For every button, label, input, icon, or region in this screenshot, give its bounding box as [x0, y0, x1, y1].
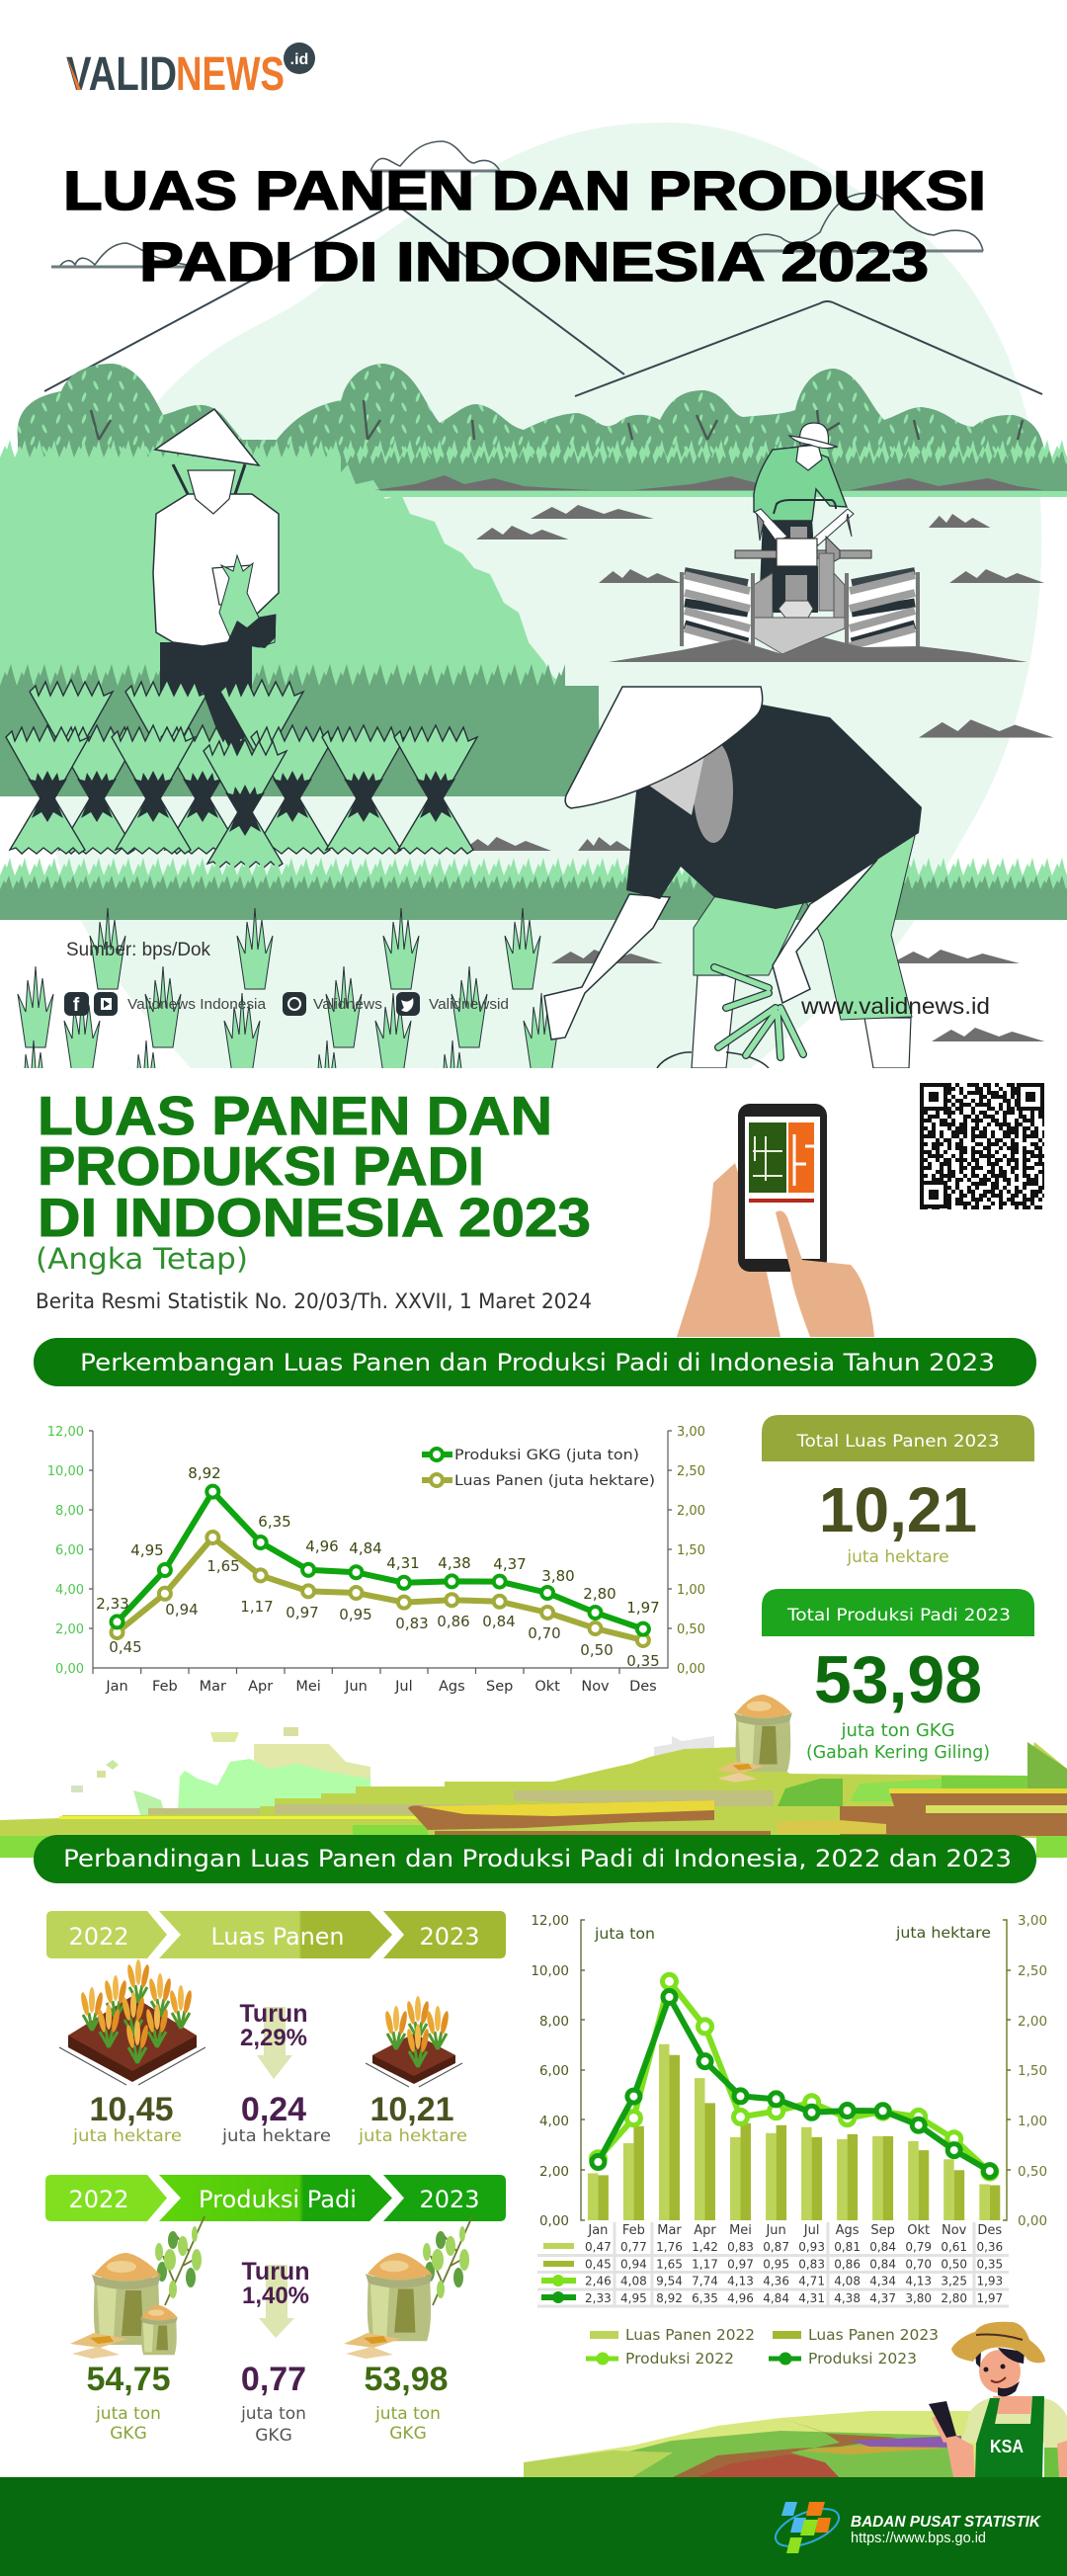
icon: youtube	[94, 992, 118, 1016]
row: luas panen 2022: 0,83	[727, 2240, 754, 2254]
bars: luas panen 2023	[598, 2055, 1000, 2220]
footer bar	[0, 2477, 1067, 2576]
chevron header	[46, 1911, 506, 1958]
value: 2023 production: GKG	[389, 2424, 427, 2444]
title	[63, 159, 986, 292]
chevron header: 2022	[68, 2186, 129, 2213]
right axis labels: 2,50	[1018, 1963, 1047, 1979]
chevron header: 2022	[68, 1923, 129, 1951]
axis units	[594, 1924, 991, 1943]
mint hill background	[47, 123, 1041, 1068]
stat card: total harvested area	[762, 1415, 1034, 1567]
right axis labels: 0,00	[677, 1662, 705, 1677]
rice bundles	[6, 680, 477, 868]
row: luas panen 2022: 0,61	[941, 2240, 967, 2254]
icon: twitter	[396, 992, 420, 1016]
value: change in production: juta ton	[240, 2404, 306, 2424]
production value labels: 4,96	[305, 1537, 339, 1555]
stat card: total harvested area: juta hektare	[846, 1547, 949, 1567]
production series	[117, 1492, 643, 1629]
panel: harvested area comparison	[46, 1911, 506, 2146]
chart legend: Produksi 2023	[808, 2350, 917, 2368]
icon: small rice field plot	[366, 1996, 462, 2087]
row: produksi 2022: 4,71	[798, 2275, 825, 2288]
line chart: monthly production and harvested area 2023	[47, 1425, 705, 1695]
production value labels: 2,33	[96, 1595, 129, 1613]
production value labels: 1,97	[626, 1599, 660, 1617]
combo chart: 2022 vs 2023	[531, 1913, 1047, 2368]
harvested area value labels: 0,94	[165, 1601, 199, 1619]
value: 2022 harvested area: juta hektare	[72, 2126, 182, 2146]
decline label	[242, 2258, 309, 2309]
value: change in harvested area: juta hektare	[221, 2126, 331, 2146]
right axis labels: 1,00	[677, 1583, 705, 1598]
icon: farmer with conical hat	[153, 409, 279, 771]
row: produksi 2022: 4,13	[727, 2275, 754, 2288]
left axis labels: 2,00	[539, 2164, 569, 2180]
left axis labels: 6,00	[55, 1543, 84, 1558]
value: 2023 production: juta ton	[374, 2404, 441, 2424]
title: PADI DI INDONESIA 2023	[139, 230, 929, 292]
harvested area value labels: 0,84	[482, 1613, 516, 1630]
right axis labels: 3,00	[677, 1425, 705, 1440]
BPS name and url: https://www.bps.go.id	[851, 2530, 986, 2546]
decline label: Turun	[240, 2000, 307, 2028]
month labels: Okt	[534, 1679, 560, 1695]
left axis labels: 6,00	[539, 2063, 569, 2079]
row: produksi 2023: 3,80	[905, 2291, 932, 2305]
right axis labels: 1,00	[1018, 2114, 1047, 2129]
table header: Mei	[729, 2223, 752, 2238]
row: produksi 2023: 1,97	[976, 2291, 1003, 2305]
row: produksi 2023: 4,38	[834, 2291, 861, 2305]
table header: Des	[977, 2223, 1002, 2238]
row: luas panen 2022: 0,93	[798, 2240, 825, 2254]
logo: Validnews: VALID	[66, 48, 177, 101]
logo: BPS	[771, 2501, 844, 2554]
value: change in harvested area	[221, 2091, 331, 2146]
chart legend: Produksi GKG (juta ton)	[454, 1448, 639, 1463]
row: luas panen 2023: 0,94	[620, 2257, 647, 2271]
row: produksi 2022: 4,34	[869, 2275, 896, 2288]
logo: Validnews	[66, 42, 315, 101]
row: luas panen 2023: 0,95	[763, 2257, 789, 2271]
month labels: Jul	[394, 1679, 413, 1695]
row: luas panen 2023: 0,70	[905, 2257, 932, 2271]
right axis labels: 0,50	[677, 1622, 705, 1637]
row: produksi 2022: 9,54	[656, 2275, 683, 2288]
value: 2023 production	[364, 2361, 449, 2444]
axes	[581, 1920, 585, 2220]
row: luas panen 2023: 0,83	[798, 2257, 825, 2271]
production value labels: 4,95	[130, 1541, 164, 1559]
table header	[587, 2223, 1002, 2238]
value: 2023 harvested area	[358, 2091, 467, 2146]
table header: Apr	[694, 2223, 716, 2238]
landscape: bottom hill	[524, 2411, 1067, 2477]
month labels: Jun	[344, 1679, 368, 1695]
left axis labels: 12,00	[531, 1913, 569, 1929]
table header: Jan	[587, 2223, 608, 2238]
field shadow band	[0, 664, 599, 796]
row: luas panen 2023: 0,86	[834, 2257, 861, 2271]
harvested area value labels: 0,70	[528, 1624, 561, 1642]
left axis labels: 12,00	[47, 1425, 84, 1440]
value: change in production	[240, 2361, 306, 2446]
icon: facebook	[64, 992, 89, 1016]
right axis labels	[677, 1425, 705, 1677]
logo: Validnews: .id	[290, 51, 308, 68]
row: luas panen 2022: 0,84	[869, 2240, 896, 2254]
decline label	[240, 2000, 307, 2051]
QR code	[920, 1083, 1044, 1208]
stat card: total harvested area: Total Luas Panen 2023	[795, 1432, 1000, 1452]
data table	[537, 2222, 1009, 2306]
production value labels: 4,37	[493, 1555, 527, 1573]
value: change in production: GKG	[255, 2426, 292, 2446]
row: produksi 2023: 6,35	[692, 2291, 718, 2305]
harvested area value labels: 0,35	[626, 1652, 660, 1670]
row: luas panen 2023: 0,97	[727, 2257, 754, 2271]
value: 2022 harvested area: 10,45	[89, 2091, 174, 2128]
tree line	[18, 364, 1045, 464]
right axis labels: 2,50	[677, 1464, 705, 1479]
icon: farmer on tractor	[609, 423, 1027, 662]
row: luas panen 2022: 0,47	[585, 2240, 612, 2254]
row: produksi 2023	[541, 2291, 1003, 2305]
chevron header	[45, 2175, 506, 2221]
row: produksi 2022: 3,25	[941, 2275, 967, 2288]
row: produksi 2022: 4,36	[763, 2275, 789, 2288]
chevron header: Luas Panen	[211, 1923, 344, 1951]
icon: rice sacks 2022	[70, 2216, 205, 2359]
banner: Perbandingan: Perbandingan Luas Panen dan Produksi Padi di Indonesia, 2022 dan 2023	[63, 1845, 1012, 1872]
chart legend: Luas Panen (juta hektare)	[454, 1473, 655, 1489]
harvested area value labels: 0,97	[286, 1604, 319, 1621]
landscape: terraced rice fields	[0, 1695, 1067, 1858]
stat card: total harvested area: 10,21	[819, 1474, 977, 1545]
harvested area value labels: 0,45	[109, 1638, 142, 1656]
left axis labels: 4,00	[539, 2114, 569, 2129]
decline label: Turun	[242, 2258, 309, 2285]
handle: instagram: Validnews	[313, 996, 382, 1013]
harvested area value labels: 0,95	[339, 1606, 372, 1623]
publication reference: Berita Resmi Statistik No. 20/03/Th. XXVII, 1 Maret 2024	[36, 1289, 592, 1313]
row: produksi 2022	[541, 2275, 1003, 2288]
section heading: PRODUKSI PADI	[38, 1135, 484, 1197]
production value labels: 3,80	[541, 1567, 575, 1585]
icon: instagram	[283, 992, 306, 1016]
production value labels: 8,92	[188, 1464, 221, 1482]
left axis labels	[47, 1425, 84, 1677]
stat card: total rice production: Total Produksi Padi 2023	[786, 1606, 1011, 1625]
row: luas panen 2022: 0,36	[976, 2240, 1003, 2254]
value: 2022 production: juta ton	[95, 2404, 161, 2424]
right axis labels: 2,00	[1018, 2014, 1047, 2030]
left axis labels: 4,00	[55, 1583, 84, 1598]
panel: rice production comparison	[45, 2175, 506, 2446]
axis units: juta ton	[594, 1925, 655, 1943]
subtitle: (Angka Tetap)	[36, 1242, 248, 1276]
row: produksi 2023: 4,31	[798, 2291, 825, 2305]
BPS name and url	[851, 2514, 1041, 2546]
stat card: total rice production: juta ton GKG	[840, 1720, 955, 1741]
left axis labels: 8,00	[539, 2014, 569, 2030]
harvested area value labels: 0,83	[395, 1615, 429, 1632]
row: luas panen 2022: 0,77	[620, 2240, 647, 2254]
table header: Ags	[836, 2223, 860, 2238]
BPS name and url: BADAN PUSAT STATISTIK	[851, 2514, 1041, 2531]
value: 2023 harvested area: juta hektare	[358, 2126, 467, 2146]
line: produksi 2022	[598, 1981, 990, 2172]
harvested area value labels	[109, 1557, 660, 1670]
row: produksi 2022: 1,93	[976, 2275, 1003, 2288]
banner: Perkembangan: Perkembangan Luas Panen dan Produksi Padi di Indonesia Tahun 2023	[80, 1349, 995, 1376]
icon: facebook: f	[73, 995, 80, 1016]
harvested area value labels: 1,17	[240, 1598, 274, 1616]
right axis labels: 0,00	[1018, 2213, 1047, 2229]
mountain outlines	[44, 204, 1042, 396]
chart legend	[422, 1448, 655, 1489]
production value labels: 6,35	[258, 1513, 291, 1531]
value: 2023 harvested area: 10,21	[369, 2091, 454, 2128]
decline label: 1,40%	[242, 2283, 309, 2309]
production value labels	[96, 1464, 660, 1617]
left axis labels: 2,00	[55, 1622, 84, 1637]
icon: woman planting rice	[544, 687, 922, 1068]
left axis labels: 10,00	[531, 1963, 569, 1979]
stat card: total rice production: (Gabah Kering Giling)	[806, 1742, 990, 1763]
month labels: Sep	[486, 1679, 513, 1695]
banner: Perkembangan	[34, 1338, 1036, 1386]
icon: large rice field plot	[59, 1959, 205, 2085]
axis units: juta hektare	[895, 1924, 991, 1942]
month labels	[105, 1679, 657, 1695]
section heading: DI INDONESIA 2023	[38, 1187, 591, 1248]
value: 2023 production: 53,98	[364, 2361, 449, 2398]
row: produksi 2023: 4,95	[620, 2291, 647, 2305]
right axis labels: 2,00	[677, 1504, 705, 1519]
month labels: Mei	[295, 1679, 321, 1695]
banner: Perbandingan	[34, 1835, 1036, 1883]
left axis labels: 10,00	[47, 1464, 84, 1479]
table header: Okt	[907, 2223, 930, 2238]
month labels: Nov	[581, 1679, 610, 1695]
row: produksi 2022: 4,13	[905, 2275, 932, 2288]
value: change in harvested area: 0,24	[241, 2091, 306, 2128]
left axis labels: 8,00	[55, 1504, 84, 1519]
harvested area value labels: 0,50	[580, 1641, 614, 1659]
arrow: decline	[259, 2265, 294, 2338]
row: luas panen 2022: 0,79	[905, 2240, 932, 2254]
logo: Validnews: NEWS	[176, 48, 285, 101]
chevron header: 2023	[419, 2186, 480, 2213]
table header: Sep	[870, 2223, 895, 2238]
chart legend: Produksi 2022	[625, 2350, 734, 2368]
row: luas panen 2022	[543, 2240, 1003, 2254]
handle: twitter: Validnewsid	[429, 996, 509, 1013]
icon: KSA farmer mascot	[929, 2322, 1067, 2478]
table header: Jul	[803, 2223, 819, 2238]
icon: phone held in hand	[677, 1104, 874, 1337]
arrow: decline	[257, 2007, 292, 2079]
month labels: Jan	[105, 1679, 128, 1695]
month labels: Ags	[439, 1679, 465, 1695]
row: luas panen 2023	[543, 2257, 1003, 2271]
row: luas panen 2023: 0,84	[869, 2257, 896, 2271]
soil mounds	[374, 475, 1054, 1041]
row: produksi 2023: 4,37	[869, 2291, 896, 2305]
harvested area value labels: 1,65	[206, 1557, 240, 1575]
stat card: total rice production: 53,98	[814, 1642, 982, 1717]
production value labels: 4,31	[386, 1554, 420, 1572]
left axis labels: 0,00	[539, 2213, 569, 2229]
chart legend	[586, 2326, 939, 2368]
right axis labels: 1,50	[1018, 2063, 1047, 2079]
seedlings	[16, 908, 557, 1068]
production value labels: 2,80	[583, 1585, 616, 1603]
section heading: LUAS PANEN DAN	[38, 1085, 552, 1146]
row: produksi 2023: 2,33	[585, 2291, 612, 2305]
month labels: Des	[629, 1679, 657, 1695]
bars: luas panen 2022	[588, 2044, 990, 2220]
light green rice field	[0, 464, 600, 731]
row: luas panen 2022: 1,76	[656, 2240, 683, 2254]
row: luas panen 2023: 0,50	[941, 2257, 967, 2271]
axes	[89, 1431, 672, 1674]
month labels: Feb	[152, 1679, 178, 1695]
harvested area value labels: 0,86	[437, 1613, 470, 1630]
left axis labels: 0,00	[55, 1662, 84, 1677]
clouds	[51, 141, 983, 267]
title: LUAS PANEN DAN PRODUKSI	[63, 159, 986, 221]
grass band lower	[0, 858, 1067, 920]
right axis labels: 3,00	[1018, 1913, 1047, 1929]
row: luas panen 2022: 0,87	[763, 2240, 789, 2254]
handle: facebook and youtube: Validnews Indonesia	[127, 996, 267, 1013]
row: luas panen 2022: 0,81	[834, 2240, 861, 2254]
social media row	[64, 992, 509, 1016]
right axis labels	[1018, 1913, 1047, 2229]
production value labels: 4,38	[438, 1554, 471, 1572]
table header: Nov	[942, 2223, 967, 2238]
row: produksi 2023: 2,80	[941, 2291, 967, 2305]
value: 2022 harvested area	[72, 2091, 182, 2146]
chart legend: Luas Panen 2023	[808, 2326, 939, 2344]
table header: Feb	[622, 2223, 645, 2238]
chevron header: 2023	[419, 1923, 480, 1951]
row: produksi 2023: 4,84	[763, 2291, 789, 2305]
row: luas panen 2023: 0,45	[585, 2257, 612, 2271]
value: change in production: 0,77	[241, 2361, 306, 2398]
panel: hero illustration	[0, 123, 1067, 1122]
value: 2022 production: 54,75	[86, 2361, 171, 2398]
decline label: 2,29%	[240, 2025, 307, 2051]
line: produksi 2023	[598, 1997, 990, 2171]
table header: Mar	[657, 2223, 682, 2238]
row: luas panen 2022: 1,42	[692, 2240, 718, 2254]
row: produksi 2022: 2,46	[585, 2275, 612, 2288]
row: produksi 2023: 8,92	[656, 2291, 683, 2305]
row: produksi 2022: 4,08	[620, 2275, 647, 2288]
grass band upper	[0, 440, 1067, 497]
website url: www.validnews.id	[800, 993, 990, 1019]
month labels: Mar	[200, 1679, 226, 1695]
row: luas panen 2023: 1,65	[656, 2257, 683, 2271]
month labels: Apr	[248, 1679, 273, 1695]
section heading	[38, 1085, 591, 1248]
production value labels: 4,84	[349, 1539, 382, 1557]
icon: KSA farmer mascot: KSA	[990, 2437, 1024, 2456]
left axis labels	[531, 1913, 569, 2229]
right axis labels: 1,50	[677, 1543, 705, 1558]
stat card: total rice production	[762, 1589, 1034, 1763]
row: produksi 2022: 4,08	[834, 2275, 861, 2288]
source text: Sumber: bps/Dok	[66, 940, 210, 960]
row: luas panen 2023: 1,17	[692, 2257, 718, 2271]
row: produksi 2022: 7,74	[692, 2275, 718, 2288]
icon: rice sack 2023	[344, 2216, 472, 2359]
value: 2022 production: GKG	[110, 2424, 147, 2444]
harvested area series	[117, 1537, 643, 1640]
row: luas panen 2023: 0,35	[976, 2257, 1003, 2271]
table header: Jun	[765, 2223, 786, 2238]
chevron header: Produksi Padi	[199, 2186, 357, 2213]
row: produksi 2023: 4,96	[727, 2291, 754, 2305]
chart legend: Luas Panen 2022	[625, 2326, 755, 2344]
value: 2022 production	[86, 2361, 171, 2444]
right axis labels: 0,50	[1018, 2164, 1047, 2180]
